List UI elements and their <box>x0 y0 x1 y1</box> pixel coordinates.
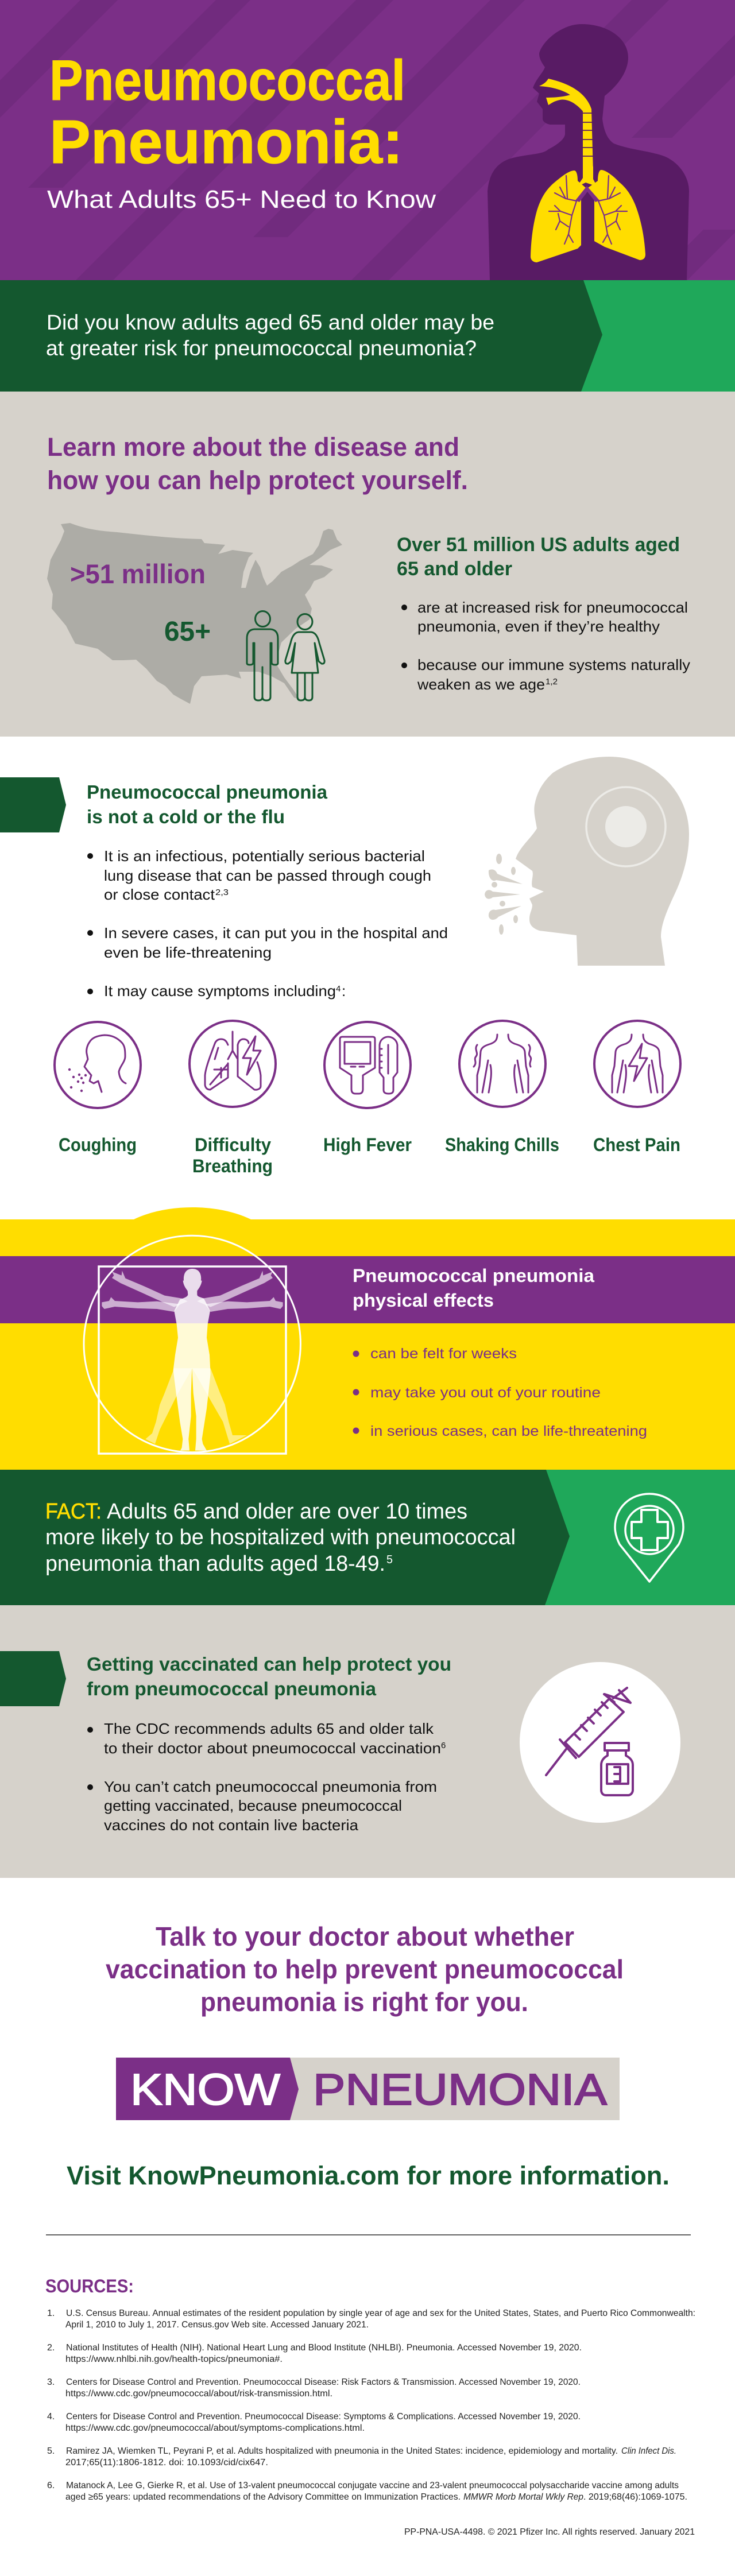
heading: Getting vaccinated can help protect you <box>87 1653 451 1675</box>
bullet list <box>401 599 690 693</box>
arrow tab <box>0 1651 66 1706</box>
bullet list: In severe cases, it can put you in the hospital and <box>104 924 448 942</box>
source 2 <box>47 2343 582 2364</box>
heading <box>353 1265 594 1311</box>
panel: symptoms <box>55 1021 680 1176</box>
source 3 <box>47 2377 581 2399</box>
title <box>49 48 405 176</box>
bullet list: are at increased risk for pneumococcal <box>417 599 688 616</box>
panel: physical effects <box>0 1207 735 1470</box>
fact text: Adults 65 and older are over 10 times <box>107 1500 467 1524</box>
symptom labels <box>59 1134 680 1176</box>
fact text: 5 <box>386 1554 393 1566</box>
icon: man and woman <box>247 611 324 700</box>
bullet list: You can’t catch pneumococcal pneumonia from <box>104 1778 437 1795</box>
bullet list: weaken as we age <box>417 676 545 693</box>
source 3: Centers for Disease Control and Prevention. Pneumococcal Disease: Risk Factors & Transmission. Accessed November 19, 2020. <box>66 2377 581 2387</box>
symptom: coughing <box>55 1022 141 1108</box>
map label: 65+: 65+ <box>164 617 211 647</box>
panel: not a cold or the flu <box>0 757 689 1000</box>
icon: silhouette with lungs <box>488 24 689 280</box>
panel: fact band <box>0 1470 735 1605</box>
source 5: Ramirez JA, Wiemken TL, Peyrani P, et al. Adults hospitalized with pneumonia in the United States: incidence, epidemiology and mortality. <box>66 2446 618 2456</box>
icon: coughing head <box>485 757 689 966</box>
statistic heading <box>397 534 680 580</box>
symptom labels: Shaking Chills <box>445 1134 559 1155</box>
heading <box>87 781 328 827</box>
bullet list <box>87 1720 446 1834</box>
question text: at greater risk for pneumococcal pneumonia? <box>46 336 477 360</box>
bullet list: It is an infectious, potentially serious bacterial <box>104 847 425 865</box>
heading: from pneumococcal pneumonia <box>87 1678 377 1699</box>
source 2: National Institutes of Health (NIH). National Heart Lung and Blood Institute (NHLBI). Pneumonia. Accessed November 19, 2020. <box>66 2343 582 2353</box>
source 3: https://www.cdc.gov/pneumococcal/about/risk-transmission.html. <box>65 2389 332 2399</box>
statistic heading: 65 and older <box>397 558 512 580</box>
source 6: MMWR Morb Mortal Wkly Rep <box>463 2492 583 2502</box>
source 4: 4. <box>47 2412 55 2422</box>
heading: how you can help protect yourself. <box>47 466 468 495</box>
source 6: Matanock A, Lee G, Gierke R, et al. Use of 13-valent pneumococcal conjugate vaccine and 23-valent pneumococcal polysaccharide vaccine among adults <box>66 2481 679 2490</box>
logo: Know Pneumonia: KNOW <box>130 2065 280 2114</box>
bullet list: in serious cases, can be life-threatening <box>370 1423 647 1439</box>
symptom labels: Breathing <box>192 1156 273 1176</box>
call to action <box>106 1922 624 2017</box>
call to action: vaccination to help prevent pneumococcal <box>106 1954 624 1984</box>
bullet list: It may cause symptoms including <box>104 982 336 1000</box>
heading <box>47 432 468 495</box>
arrow tab <box>0 777 66 832</box>
symptom: difficulty breathing <box>189 1021 276 1107</box>
bullet list: can be felt for weeks <box>370 1346 517 1362</box>
source 5: Clin Infect Dis. <box>621 2446 676 2456</box>
panel: header <box>0 0 735 280</box>
panel: vaccination <box>0 1605 735 1878</box>
subtitle: What Adults 65+ Need to Know <box>47 185 436 214</box>
icon: hospital location pin <box>615 1494 683 1582</box>
call to action: Talk to your doctor about whether <box>156 1922 574 1951</box>
question text <box>46 311 494 360</box>
symptom labels: High Fever <box>323 1134 412 1155</box>
heading: Pneumococcal pneumonia <box>87 781 328 803</box>
source 4: Centers for Disease Control and Prevention. Pneumococcal Disease: Symptoms & Complications. Accessed November 19, 2020. <box>66 2412 581 2422</box>
source 1: April 1, 2010 to July 1, 2017. Census.gov Web site. Accessed January 2021. <box>65 2320 369 2330</box>
symptom labels: Coughing <box>59 1134 137 1155</box>
bullet list: vaccines do not contain live bacteria <box>104 1816 359 1834</box>
map label: >51 million: >51 million <box>70 559 206 589</box>
bullet list: 1,2 <box>546 677 558 687</box>
heading: is not a cold or the flu <box>87 806 285 827</box>
source 6: 6. <box>47 2481 55 2490</box>
bullet list: 6 <box>441 1741 446 1750</box>
bullet list <box>353 1346 647 1439</box>
source 5: 2017;65(11):1806-1812. doi: 10.1093/cid/cix647. <box>65 2458 268 2467</box>
bullet list: even be life-threatening <box>104 944 272 961</box>
icon: syringe and vial <box>520 1662 680 1823</box>
logo: Know Pneumonia: PNEUMONIA <box>313 2065 608 2114</box>
bullet list: or close contact <box>104 886 215 903</box>
source 6: . 2019;68(46):1069-1075. <box>583 2492 687 2502</box>
fact text <box>45 1500 516 1576</box>
sources <box>45 2276 695 2502</box>
source 6: aged ≥65 years: updated recommendations of the Advisory Committee on Immunization Practices. <box>65 2492 461 2502</box>
symptom: chest pain <box>594 1021 680 1107</box>
heading: Learn more about the disease and <box>47 432 459 462</box>
call to action: pneumonia is right for you. <box>200 1987 528 2017</box>
bullet list: lung disease that can be passed through cough <box>104 867 431 884</box>
sources heading: SOURCES: <box>45 2276 134 2296</box>
panel: question band <box>0 280 735 392</box>
symptom labels: Chest Pain <box>593 1134 680 1155</box>
footer copyright: PP-PNA-USA-4498. © 2021 Pfizer Inc. All rights reserved. January 2021 <box>404 2527 695 2537</box>
map of the United States <box>47 523 342 704</box>
source 4 <box>47 2412 581 2433</box>
source 1: 1. <box>47 2308 55 2318</box>
statistic heading: Over 51 million US adults aged <box>397 534 680 556</box>
bullet list: : <box>342 982 346 1000</box>
panel: learn more <box>0 392 735 737</box>
symptom labels: Difficulty <box>195 1134 271 1155</box>
website link: Visit KnowPneumonia.com for more information. <box>67 2161 670 2190</box>
icon: vitruvian figure <box>84 1235 300 1454</box>
fact text: more likely to be hospitalized with pneumococcal <box>45 1525 516 1550</box>
bullet list: 4 <box>336 984 341 994</box>
symptom: high fever <box>324 1022 411 1108</box>
bullet list: pneumonia, even if they’re healthy <box>417 618 660 635</box>
source 1: U.S. Census Bureau. Annual estimates of the resident population by single year of age and sex for the United States, States, and Puerto Rico Commonwealth: <box>66 2308 695 2318</box>
bullet list: The CDC recommends adults 65 and older talk <box>104 1720 434 1737</box>
source 2: https://www.nhlbi.nih.gov/health-topics/pneumonia#. <box>65 2354 283 2364</box>
logo: Know Pneumonia <box>116 2058 620 2120</box>
symptom: shaking chills <box>459 1021 546 1107</box>
source 5: 5. <box>47 2446 55 2456</box>
heading: Pneumococcal pneumonia <box>353 1265 594 1286</box>
bullet list <box>87 847 448 1000</box>
source 2: 2. <box>47 2343 55 2353</box>
heading <box>87 1653 451 1699</box>
heading: physical effects <box>353 1290 494 1311</box>
bullet list: 2,3 <box>215 888 229 897</box>
source 5 <box>47 2446 676 2467</box>
source 3: 3. <box>47 2377 55 2387</box>
bullet list: getting vaccinated, because pneumococcal <box>104 1797 402 1814</box>
fact text: FACT: <box>45 1500 102 1524</box>
question text: Did you know adults aged 65 and older may be <box>47 311 494 334</box>
source 6 <box>47 2481 687 2502</box>
bullet list: may take you out of your routine <box>370 1385 601 1401</box>
bullet list: to their doctor about pneumococcal vaccination <box>104 1740 441 1757</box>
source 4: https://www.cdc.gov/pneumococcal/about/symptoms-complications.html. <box>65 2423 365 2433</box>
fact text: pneumonia than adults aged 18-49. <box>45 1552 385 1576</box>
source 1 <box>47 2308 695 2330</box>
title: Pneumonia: <box>49 107 403 176</box>
bullet list: because our immune systems naturally <box>417 656 690 673</box>
title: Pneumococcal <box>49 48 405 112</box>
